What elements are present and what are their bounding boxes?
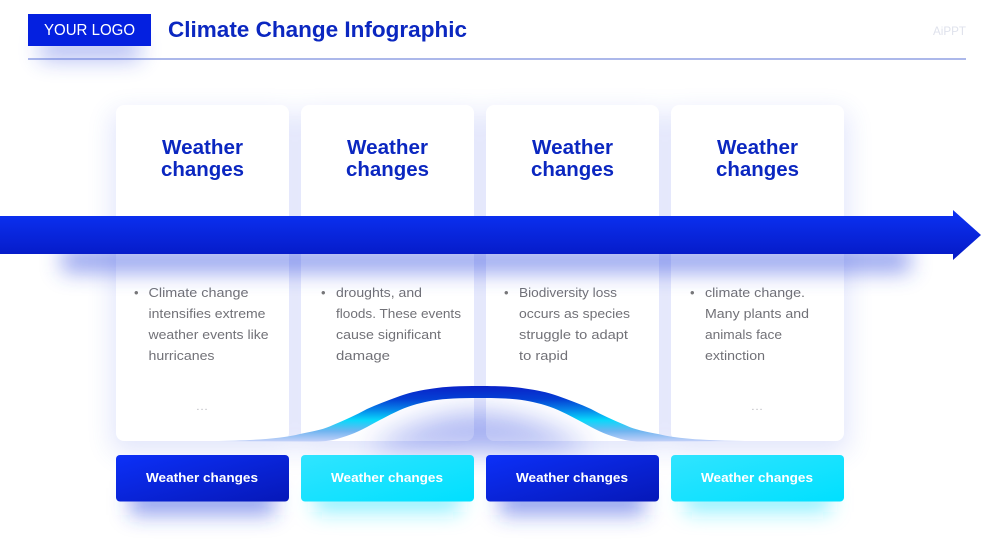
card 1 content bbox=[134, 137, 268, 413]
card 4 body text: extinction bbox=[705, 348, 765, 363]
logo bbox=[28, 14, 151, 46]
card 4 heading: Weather bbox=[717, 137, 798, 159]
card 1 body text: hurricanes bbox=[148, 348, 215, 363]
curved ribbon bbox=[213, 386, 745, 442]
logo shadow bbox=[40, 38, 140, 60]
card 1 heading bbox=[161, 137, 244, 181]
card 3 body text: • bbox=[504, 285, 509, 300]
card 2 body text bbox=[321, 285, 462, 363]
card 1 heading: changes bbox=[161, 159, 244, 181]
card 3 heading: changes bbox=[531, 159, 614, 181]
card 4 heading: changes bbox=[716, 159, 799, 181]
card 3 body text: Biodiversity loss bbox=[519, 285, 618, 300]
button 3 bbox=[486, 455, 659, 502]
card 2 body text: cause significant bbox=[336, 327, 441, 342]
card 2 heading bbox=[346, 137, 429, 181]
card 1 body text: Climate change bbox=[148, 285, 248, 300]
curve shadow bbox=[365, 412, 593, 450]
card shadows bbox=[112, 112, 848, 452]
card 1 body text: weather events like bbox=[147, 327, 268, 342]
card 3 body text bbox=[504, 285, 631, 363]
button 4: Weather changes bbox=[701, 470, 813, 485]
card 2 content bbox=[321, 137, 462, 363]
card 2 body text: damage bbox=[336, 348, 390, 363]
brand mark: AiPPT bbox=[933, 24, 967, 38]
button 2 bbox=[301, 455, 474, 502]
card 2 body text: floods. These events bbox=[336, 306, 462, 321]
card 2 body text: • bbox=[321, 285, 326, 300]
panel: card backgrounds bbox=[116, 105, 844, 441]
card 4 body text bbox=[690, 285, 809, 363]
card 1 body text: intensifies extreme bbox=[148, 306, 266, 321]
arrow bbox=[0, 210, 981, 260]
button 3: Weather changes bbox=[516, 470, 628, 485]
card 4 heading bbox=[716, 137, 799, 181]
card 1 heading: Weather bbox=[162, 137, 243, 159]
card 3 content bbox=[504, 137, 631, 363]
logo: YOUR LOGO bbox=[44, 22, 135, 39]
card 1 body text bbox=[134, 285, 268, 363]
card 3 heading: Weather bbox=[532, 137, 613, 159]
button 4 bbox=[671, 455, 844, 502]
arrow shadow bbox=[62, 248, 910, 272]
card 4 body text: • bbox=[690, 285, 695, 300]
card 3 body text: to rapid bbox=[519, 348, 568, 363]
card 1 body text: • bbox=[134, 285, 139, 300]
button 1 bbox=[116, 455, 289, 502]
card 2 heading: Weather bbox=[347, 137, 428, 159]
card 4 body text: Many plants and bbox=[705, 306, 809, 321]
card 1 ellipsis: ... bbox=[196, 401, 209, 413]
button 1: Weather changes bbox=[146, 470, 258, 485]
card 3 body text: struggle to adapt bbox=[519, 327, 628, 342]
card 2 body text: droughts, and bbox=[336, 285, 422, 300]
card 3 heading bbox=[531, 137, 614, 181]
card 4 body text: climate change. bbox=[705, 285, 805, 300]
card 4 ellipsis: ... bbox=[751, 401, 764, 413]
card 2 heading: changes bbox=[346, 159, 429, 181]
card 4 body text: animals face bbox=[705, 327, 782, 342]
card 4 content bbox=[690, 137, 809, 413]
title: Climate Change Infographic bbox=[168, 17, 467, 42]
button shadows bbox=[130, 488, 830, 515]
button 2: Weather changes bbox=[331, 470, 443, 485]
card 3 body text: occurs as species bbox=[519, 306, 631, 321]
